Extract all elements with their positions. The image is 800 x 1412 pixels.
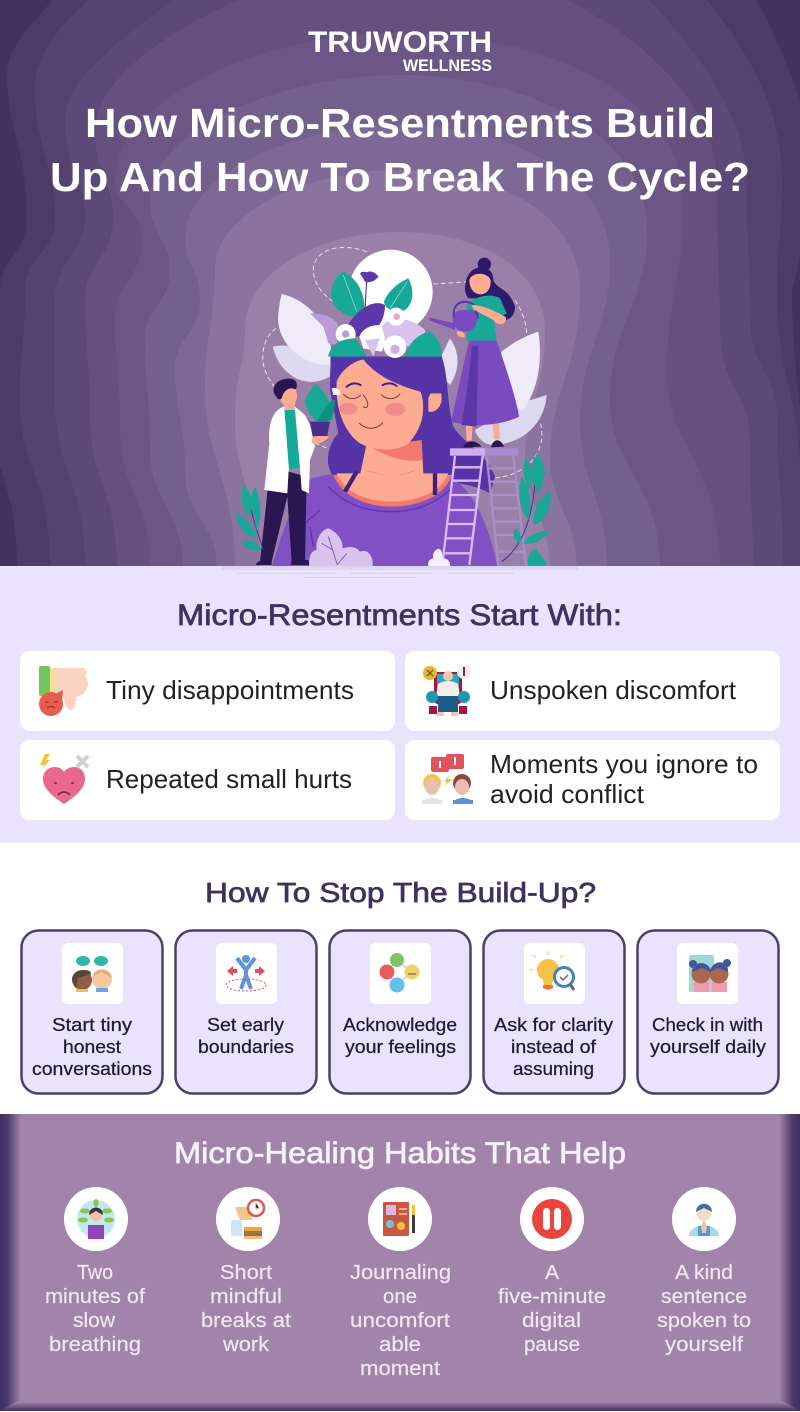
- card: ask for clarity: instead of: [511, 1036, 597, 1057]
- icon: breathing woman: [77, 1199, 115, 1239]
- girl hair back: [328, 357, 495, 493]
- card: set early boundaries: Set early: [207, 1014, 285, 1035]
- panel: micro-resentments start with: [0, 566, 800, 843]
- card: moments you ignore: avoid conflict: [490, 779, 645, 809]
- title: Up And How To Break The Cycle?: [50, 154, 750, 200]
- habit: kind sentence: yourself: [665, 1334, 743, 1356]
- icon: two people in conflict: [422, 754, 473, 804]
- habit: journaling: moment: [360, 1358, 440, 1380]
- logo: TRUWORTH: [308, 26, 492, 59]
- panel: how to stop the build-up: [0, 843, 800, 1114]
- habit: kind sentence: A kind: [675, 1262, 733, 1284]
- icon: thumbs down: [39, 666, 88, 716]
- panel: hero background: [0, 0, 800, 570]
- icon: mirror self check: [689, 955, 731, 992]
- habit: slow breathing: minutes of: [45, 1286, 145, 1308]
- facial features: [339, 383, 405, 428]
- sweater leaf and buds: [309, 528, 373, 566]
- icon: journal and pen: [383, 1202, 415, 1236]
- man: [256, 379, 340, 565]
- card: moments you ignore: [405, 740, 780, 820]
- card: ask for clarity: Ask for clarity: [494, 1014, 614, 1035]
- face: [336, 359, 423, 450]
- habit: digital pause: pause: [524, 1334, 580, 1356]
- card: check in with yourself: Check in with: [652, 1014, 763, 1035]
- habit: mindful breaks: [201, 1187, 291, 1356]
- habit: mindful breaks: work: [222, 1334, 270, 1356]
- habit: digital pause: [498, 1187, 606, 1356]
- habit: mindful breaks: mindful: [210, 1286, 282, 1308]
- card: start tiny honest conversations: conversations: [32, 1058, 152, 1079]
- woman: [428, 258, 519, 447]
- illustration: mind garden: [236, 247, 551, 567]
- habit: journaling: able: [379, 1334, 421, 1356]
- card: moments you ignore: Moments you ignore to: [490, 749, 758, 779]
- chest and neck: [333, 475, 452, 507]
- title: [50, 100, 750, 200]
- white sun circle: [349, 250, 433, 334]
- logo: [308, 26, 492, 75]
- card: tiny disappointments: Tiny disappointments: [106, 675, 354, 705]
- icon: two people talking: [72, 956, 112, 992]
- ladder: [442, 448, 526, 565]
- habit: digital pause: five-minute: [498, 1286, 606, 1308]
- back leaves: [273, 345, 333, 382]
- card: check in with yourself: [638, 930, 778, 1094]
- card: repeated small hurts: Repeated small hurts: [106, 764, 352, 794]
- icon: person in armchair: [423, 665, 471, 716]
- card: unspoken discomfort: Unspoken discomfort: [490, 675, 737, 705]
- icon: sad heart: [40, 754, 88, 804]
- icon: person with folded hands: [689, 1204, 719, 1236]
- habit: slow breathing: slow: [73, 1310, 116, 1332]
- heading: Micro-Resentments Start With:: [177, 599, 622, 632]
- floor shadows: [222, 566, 578, 578]
- habit: journaling: [350, 1187, 451, 1380]
- title: How Micro-Resentments Build: [85, 100, 715, 146]
- dashed paths: [263, 247, 542, 478]
- panel: micro-healing habits: [0, 1114, 800, 1412]
- card: acknowledge your feelings: [330, 930, 470, 1094]
- card: tiny disappointments: [20, 651, 395, 731]
- card: set early boundaries: boundaries: [198, 1036, 294, 1057]
- heading: Micro-Healing Habits That Help: [174, 1137, 626, 1170]
- hair fringe shadow: [330, 357, 447, 393]
- plants on the head: [310, 313, 338, 345]
- habit: kind sentence: [657, 1187, 751, 1356]
- habit: kind sentence: spoken to: [657, 1310, 751, 1332]
- foliage branches: [236, 453, 551, 566]
- sweater: [272, 474, 497, 567]
- card: start tiny honest conversations: [22, 930, 162, 1094]
- icon: pause button: [532, 1199, 572, 1239]
- habit: kind sentence: sentence: [661, 1286, 747, 1308]
- habit: slow breathing: [45, 1187, 145, 1356]
- card: acknowledge your feelings: Acknowledge: [343, 1014, 457, 1035]
- habit: digital pause: A: [545, 1262, 560, 1284]
- card: ask for clarity: [484, 930, 624, 1094]
- card: acknowledge your feelings: your feelings: [345, 1036, 456, 1057]
- habit: journaling: uncomfort: [350, 1310, 450, 1332]
- heading: How To Stop The Build-Up?: [205, 877, 596, 908]
- habit: journaling: one: [383, 1286, 417, 1308]
- icon: person with boundary: [226, 955, 266, 991]
- card: check in with yourself: yourself daily: [650, 1036, 767, 1057]
- habit: mindful breaks: Short: [220, 1262, 272, 1284]
- habit: journaling: Journaling: [350, 1262, 451, 1284]
- habit: mindful breaks: breaks at: [201, 1310, 291, 1332]
- card: start tiny honest conversations: honest: [63, 1036, 121, 1057]
- icon: clock, glass and sandwich: [231, 1200, 264, 1239]
- habit: digital pause: digital: [522, 1310, 581, 1332]
- habit: slow breathing: Two: [77, 1262, 113, 1284]
- card: ask for clarity: assuming: [513, 1058, 594, 1079]
- habit: slow breathing: breathing: [49, 1334, 141, 1356]
- card: unspoken discomfort: [405, 651, 780, 731]
- icon: emotion faces: [380, 953, 420, 992]
- card: start tiny honest conversations: Start tiny: [52, 1014, 133, 1035]
- icon: bulb and magnifier: [530, 951, 574, 990]
- card: repeated small hurts: [20, 740, 395, 820]
- card: set early boundaries: [176, 930, 316, 1094]
- logo: WELLNESS: [403, 56, 492, 75]
